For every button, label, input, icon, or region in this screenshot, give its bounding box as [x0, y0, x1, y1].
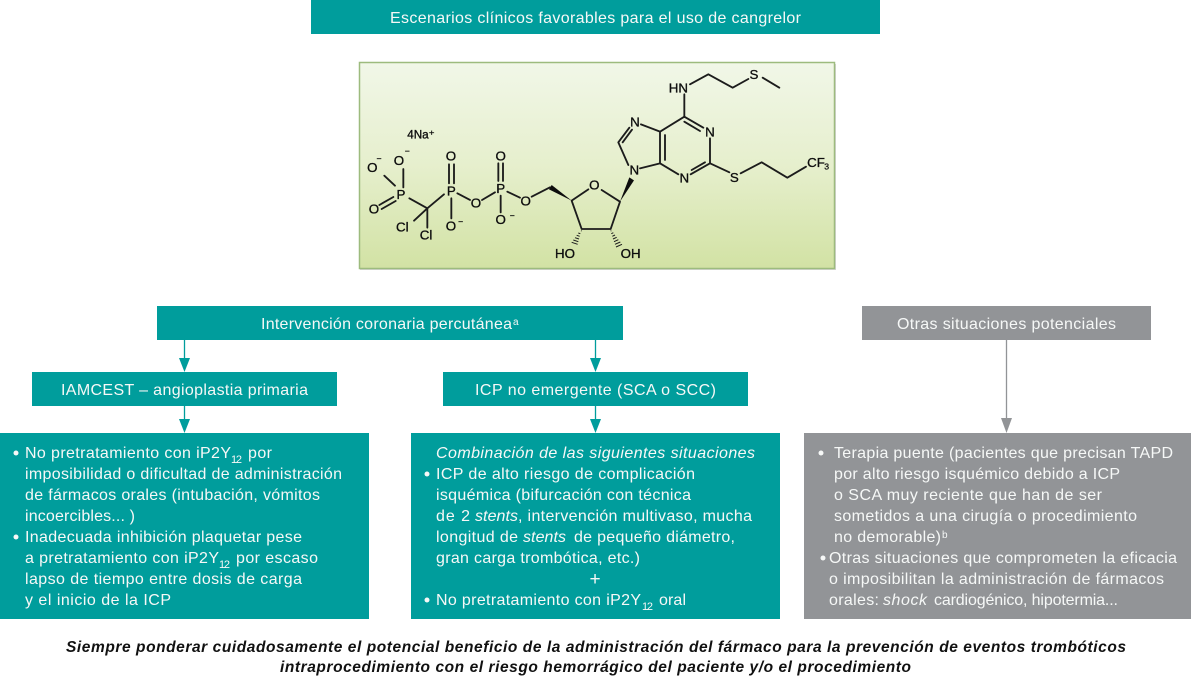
panel: otras situaciones: o imposibilitan la administración de fármacos [829, 571, 1164, 588]
atom labels: O [367, 160, 378, 175]
panel: otras situaciones: cardiogénico, hipotermia... [934, 592, 1118, 609]
panel: ICP no emergente criteria: longitud de [436, 529, 518, 546]
panel: IAMCEST criteria: y el inicio de la ICP [25, 592, 171, 609]
atom labels: S [750, 67, 759, 82]
panel: IAMCEST criteria: Inadecuada inhibición plaquetar pese [25, 529, 302, 546]
panel: IAMCEST criteria: incoercibles... ) [25, 508, 135, 525]
arrow: IAMCEST to panel [179, 406, 190, 433]
atom labels: N [630, 163, 639, 178]
atom labels: O [394, 153, 404, 168]
hashed bonds [572, 231, 622, 247]
atom labels: P [447, 183, 456, 198]
title: Escenarios clínicos favorables para el uso de cangrelor [390, 10, 802, 27]
heading: otras situaciones potenciales: Otras situaciones potenciales [897, 316, 1116, 333]
heading: intervención coronaria percutánea [157, 306, 623, 340]
panel: otras situaciones: no demorable) [834, 529, 941, 546]
panel: IAMCEST criteria: No pretratamiento con iP2Y [25, 445, 231, 462]
panel: otras situaciones [804, 433, 1191, 619]
atom labels: O [520, 193, 531, 208]
sodium counterion label: 4Na⁺ [407, 128, 435, 141]
atom labels: O [471, 195, 481, 210]
heading: intervención coronaria percutánea: a [513, 317, 519, 328]
atom labels: O [446, 148, 456, 163]
atom labels: N [705, 124, 715, 139]
arrow: ICP to IAMCEST [179, 340, 190, 372]
atom labels: HO [555, 246, 575, 261]
wedge bonds [620, 177, 634, 202]
atom labels: O [589, 178, 600, 193]
heading: intervención coronaria percutánea: Intervención coronaria percutánea [261, 316, 512, 333]
atom labels [367, 67, 829, 261]
atom labels: S [730, 170, 739, 185]
panel: IAMCEST criteria: imposibilidad o dificultad de administración [25, 466, 342, 483]
panel: IAMCEST criteria: por [248, 445, 273, 462]
atom labels: CF [807, 155, 825, 170]
panel: IAMCEST criteria: 12 [231, 454, 242, 466]
atom labels: N [680, 170, 689, 185]
atom labels: − [510, 210, 515, 220]
atom labels: O [495, 148, 506, 163]
panel: ICP no emergente criteria: Combinación de las siguientes situaciones [436, 445, 755, 462]
panel: IAMCEST criteria [0, 433, 369, 619]
panel: otras situaciones: por alto riesgo isquémico debido a ICP [834, 466, 1120, 483]
panel: ICP no emergente criteria: stents [523, 529, 566, 546]
atom labels: − [376, 154, 382, 164]
atom labels: Cl [396, 220, 409, 235]
panel: otras situaciones: orales: [829, 592, 879, 609]
atom labels: O [369, 202, 379, 217]
atom labels: O [495, 212, 506, 227]
footer note: Siempre ponderar cuidadosamente el potencial beneficio de la administración del fármaco para la prevención de eventos trombóticos [66, 639, 1126, 656]
panel: ICP no emergente criteria: + [589, 569, 601, 590]
panel: ICP no emergente criteria: stents [475, 508, 518, 525]
panel: ICP no emergente criteria: gran carga trombótica, etc.) [436, 550, 640, 567]
panel: otras situaciones: Terapia puente (pacientes que precisan TAPD [834, 445, 1173, 462]
atom labels: N [630, 115, 640, 130]
atom labels: HN [669, 80, 688, 95]
atom labels: 3 [824, 162, 829, 172]
heading: ICP no emergente: ICP no emergente (SCA o SCC) [475, 382, 716, 399]
panel: IAMCEST criteria: de fármacos orales (intubación, vómitos [25, 487, 320, 504]
panel: ICP no emergente criteria: oral [659, 592, 686, 609]
panel: ICP no emergente criteria: ICP de alto riesgo de complicación [436, 466, 695, 483]
panel: ICP no emergente criteria [411, 433, 780, 619]
arrow: ICP no emergente to panel [590, 406, 601, 433]
panel: otras situaciones: o SCA muy reciente que han de ser [834, 487, 1103, 504]
panel: IAMCEST criteria: por escaso [236, 550, 318, 567]
panel: ICP no emergente criteria: de pequeño diámetro, [574, 529, 735, 546]
footer note: intraprocedimiento con el riesgo hemorrágico del paciente y/o el procedimiento [280, 659, 911, 676]
heading: ICP no emergente [443, 372, 748, 406]
panel: IAMCEST criteria: lapso de tiempo entre dosis de carga [25, 571, 302, 588]
panel: otras situaciones: sometidos a una cirugía o procedimiento [834, 508, 1137, 525]
panel: otras situaciones: b [942, 530, 948, 541]
atom labels: − [458, 216, 463, 226]
heading: IAMCEST [32, 372, 337, 406]
heading: otras situaciones potenciales [862, 306, 1151, 340]
atom labels: O [446, 219, 456, 234]
arrow: ICP to ICP no emergente [590, 340, 601, 372]
heading: IAMCEST: IAMCEST – angioplastia primaria [61, 382, 308, 399]
footer note [66, 639, 1126, 676]
panel: IAMCEST criteria: 12 [219, 559, 230, 571]
title [311, 0, 880, 34]
atom labels: − [405, 146, 410, 156]
arrow: otras situaciones to panel [1001, 340, 1012, 433]
panel: ICP no emergente criteria: 12 [642, 601, 653, 613]
atom labels: Cl [420, 228, 432, 243]
atom labels: P [397, 187, 406, 202]
panel: otras situaciones: shock [883, 592, 928, 609]
atom labels: OH [621, 246, 641, 261]
panel: ICP no emergente criteria: , intervención multivaso, mucha [518, 508, 752, 525]
panel: ICP no emergente criteria: isquémica (bifurcación con técnica [436, 487, 691, 504]
panel: molecular structure of cangrelor [360, 62, 836, 270]
atom labels: P [496, 181, 505, 196]
chemical bonds [379, 74, 806, 229]
panel: IAMCEST criteria: a pretratamiento con iP2Y [25, 550, 219, 567]
panel: ICP no emergente criteria: No pretratamiento con iP2Y [436, 592, 641, 609]
panel: ICP no emergente criteria: de 2 [436, 508, 470, 525]
panel: otras situaciones: Otras situaciones que comprometen la eficacia [829, 550, 1177, 567]
